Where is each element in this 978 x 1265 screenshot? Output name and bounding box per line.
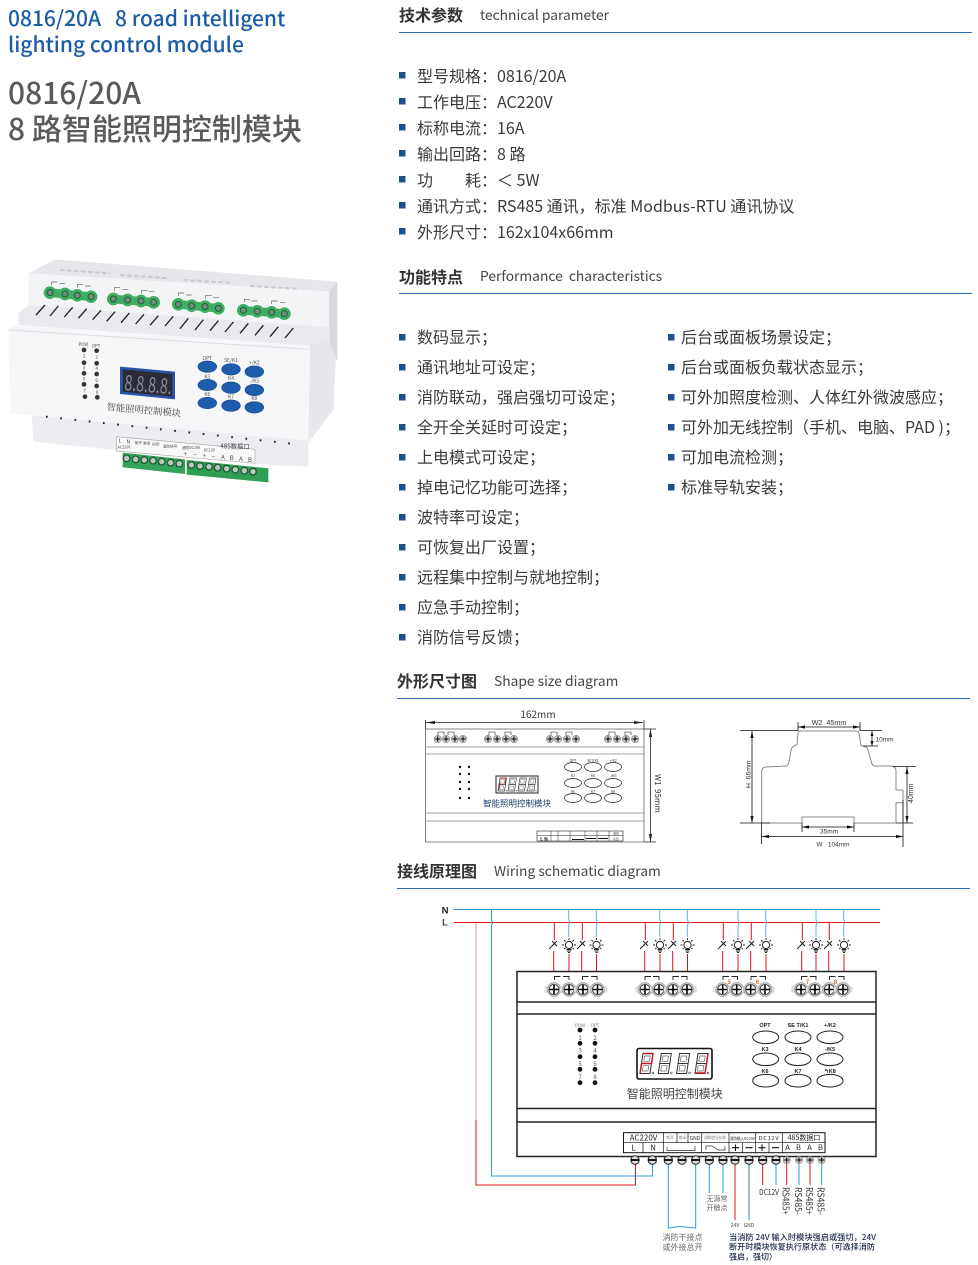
button labels: OPT [759,1023,771,1029]
feature list left: 消防信号反馈； [417,624,529,648]
W2 45mm dimension [798,718,860,731]
status LEDs: 3 [578,1046,582,1054]
parameter list [399,63,794,243]
blue buttons [198,361,264,413]
terminal table: A [807,1142,812,1153]
status LEDs: OPT [591,1023,600,1029]
status LEDs: 7 [83,389,86,395]
fire input note [729,1232,876,1262]
terminal labels: B [248,455,252,464]
section heading: performance characteristics: 功能特点 [399,264,463,288]
section heading: performance characteristics [399,264,972,294]
terminal table [537,831,623,843]
labels: fire dry contact: 或外接总开 [662,1242,702,1253]
fire input note: 断开时模块恢复执行原状态（可选择消防 [729,1242,875,1252]
fire input note: 强启，强切） [729,1252,777,1262]
section heading: technical parameter [399,2,972,32]
parameter list: 耗：＜ 5W [465,167,540,191]
output terminals [545,982,852,996]
side profile outline [762,731,903,823]
feature list left: 通讯地址可设定； [417,354,545,378]
feature list right: 后台或面板负载状态显示； [681,354,873,378]
section heading: wiring schematic diagram [397,858,970,888]
button labels: +/K2 [249,359,260,366]
button labels: -/K5 [610,774,616,779]
width dimension 162mm: 162mm [520,706,556,721]
terminal labels: A [221,452,225,461]
feature list left: 上电模式可设定； [417,444,545,468]
feature list left: 应急手动控制； [417,594,529,618]
H 66mm dimension: H 66mm [746,760,752,788]
terminal labels: − [212,451,216,460]
terminal labels: 常开 [135,440,142,446]
10mm dimension: 10mm [876,736,894,744]
button labels [759,1023,836,1075]
status LEDs [78,342,101,400]
terminal labels: 消防信号 [163,443,178,449]
parameter list: 标称电流：16A [417,115,525,139]
status LEDs: 3 [83,365,86,371]
terminal labels: 485数据口 [220,442,250,451]
terminal table: A B [613,838,619,842]
button labels: K8 [251,395,258,402]
button labels: K4 [591,774,595,779]
digital display [120,366,175,400]
terminal table: 常闭 [678,1134,686,1141]
width dimension 162mm [426,706,644,729]
labels: RS485 [780,1187,828,1215]
terminal table: 485数据口 [788,1133,820,1143]
buttons [564,762,622,802]
lamp neutral wires [569,910,845,937]
parameter list: 工作电压：AC220V [417,89,553,113]
relay brackets: 7 [806,978,809,986]
terminal labels: AC220V [118,446,131,451]
section heading: technical parameter: 技术参数 [399,2,463,26]
terminal labels [117,437,255,464]
English title: lighting control module [8,29,244,59]
height dimension 95mm [644,729,663,842]
button labels: K3 [571,774,575,779]
button labels: K8 [611,790,615,795]
feature list left: 掉电记忆功能可选择； [417,474,577,498]
button labels: K3 [761,1047,769,1053]
button labels: -/K5 [825,1047,835,1053]
status LEDs: 6 [593,1059,597,1068]
status LEDs: POW [78,342,88,348]
English title: 0816/20A [8,3,102,33]
digital display: 8.8.8.8. [123,366,173,400]
button labels: K6 [571,790,575,795]
top terminals [44,282,291,320]
button labels: K7 [228,393,234,400]
40mm dimension: 40mm [908,783,915,803]
slanted marks [36,305,293,338]
section heading: shape size diagram: 外形尺寸图 [397,668,477,692]
fire input note: 当消防 24V 输入时模块强启或强切，24V [729,1232,876,1243]
40mm dimension [893,766,916,823]
labels: RS485: RS485+ [780,1187,792,1215]
button labels: K6 [761,1069,769,1075]
labels: 24V GND [731,1222,755,1229]
button labels: K7 [794,1069,802,1075]
parameter list: 通讯方式：RS485 通讯，标准 Modbus-RTU 通讯协议 [417,193,794,217]
labels: RS485: RS485- [814,1187,828,1215]
section heading: shape size diagram: Shape size diagram [494,670,618,690]
parameter list: 功 [417,167,433,191]
terminal table: 消防输入DC24V [730,1135,755,1142]
terminal labels: GND [152,442,160,447]
buttons [753,1031,843,1087]
button labels: K6 [204,391,211,398]
status LEDs: 5 [578,1059,582,1068]
status LEDs: 2 [593,1033,597,1042]
terminal table: A [785,1142,790,1153]
button labels: +/K2 [824,1023,836,1029]
terminal labels: N [127,438,131,445]
load switch wires [554,922,844,972]
status LEDs: 8 [593,1072,597,1081]
status LEDs: POW [575,1023,585,1029]
W 104mm dimension: W 104mm [816,842,850,848]
status LEDs: OPT [92,343,101,349]
terminal table: 485 [613,832,619,837]
button labels: K7 [591,790,595,795]
top slot marks [60,270,297,289]
screw terminals [434,732,639,743]
module body [517,972,876,1156]
feature list right [668,324,960,498]
button labels: K4 [228,375,234,382]
parameter list: 外形尺寸：162x104x66mm [417,219,614,243]
wiring schematic [442,906,880,1262]
35mm dimension: 35mm [820,828,838,836]
button labels: K3 [204,373,211,380]
terminal labels: L [119,438,122,445]
button labels [570,759,617,795]
terminal labels: DC12V [204,448,216,453]
feature list right: 可外加无线控制（手机、电脑、PAD )； [681,414,960,438]
status LEDs: 2 [95,355,98,361]
parameter list: 输出回路：8 路 [417,141,525,165]
labels: passive contact: 无源常 [706,1194,728,1204]
labels: passive contact: 开触点 [706,1203,728,1213]
relay brackets: 5 [728,978,731,986]
status LEDs: 5 [83,377,86,383]
display [496,776,538,793]
terminal table: B [796,1142,801,1153]
status LEDs: 8 [96,390,99,396]
English title: 8 road intelligent [115,3,285,33]
relay brackets: 6 [756,978,759,986]
terminal table: 消防信号反馈 [704,1134,726,1141]
English title [8,3,285,59]
bottom terminals [123,453,268,482]
labels: RS485: RS485- [792,1187,805,1215]
dot row [46,417,294,444]
relay brackets: 8 [834,978,837,986]
LEDs [459,766,470,799]
N and L bus: N [442,906,449,916]
labels: 24V GND: GND [744,1222,755,1229]
module name: 智能照明控制模块 [106,399,182,420]
W2 45mm dimension: W2 45mm [812,718,846,727]
button labels [202,355,260,402]
feature list left [399,324,625,648]
terminal table [624,1132,825,1154]
label: DC12V: DC12V [759,1187,779,1198]
section heading: performance characteristics: Performance characteristics [480,265,662,285]
labels: fire dry contact [662,1232,702,1253]
terminal table: L N [540,836,548,843]
relay brackets [554,976,844,986]
terminal labels: + [203,450,207,459]
seven segment display [637,1048,712,1079]
feature list right: 可加电流检测； [681,444,793,468]
button labels: ↰K8 [824,1068,836,1075]
product photo [8,259,337,482]
button labels: SE/K1 [224,357,238,364]
height dimension 95mm: W1 95mm [652,774,663,813]
terminal labels: + [184,449,188,458]
terminal table: AC220V [630,1132,658,1144]
button labels: +/K2 [609,759,617,764]
N and L bus [442,906,880,928]
section heading: wiring schematic diagram: Wiring schematic diagram [494,860,661,880]
35mm dimension [802,823,854,836]
Chinese title: 8 路智能照明控制模块 [8,105,302,149]
status LEDs [575,1023,600,1085]
labels: 24V GND: 24V [731,1222,739,1229]
module name: 智能照明控制模块 [483,798,551,810]
section heading: wiring schematic diagram: 接线原理图 [397,858,477,882]
button labels: K4 [794,1047,802,1053]
front dimension drawing [426,706,663,843]
labels: passive contact [706,1194,728,1213]
button labels: SET/K1 [587,759,599,764]
labels: fire dry contact: 消防干接点 [662,1232,702,1243]
terminal table: B [818,1142,823,1153]
power feed wires [476,910,652,1185]
terminal table: L [631,1143,636,1154]
feature list left: 全开全关延时可设定； [417,414,577,438]
button labels: OPT [202,355,212,362]
terminal table: N [650,1143,656,1154]
feature list left: 消防联动，强启强切可设定； [417,384,625,408]
status LEDs: 7 [578,1072,582,1081]
terminal labels: A [239,454,243,463]
switches [549,941,832,949]
H 66mm dimension [740,730,798,823]
section heading: technical parameter: technical parameter [480,4,610,24]
status LEDs: 4 [593,1046,597,1054]
terminal labels: 消防DC24V [182,445,201,451]
status LEDs: 6 [95,378,98,384]
W 104mm dimension [762,800,903,848]
feature list left: 可恢复出厂设置； [417,534,545,558]
status LEDs: 1 [578,1033,582,1042]
status LEDs: 4 [95,366,98,372]
feature list left: 波特率可设定； [417,504,529,528]
button labels: OPT [570,759,576,764]
status LEDs: 1 [83,353,86,359]
button labels: SE T/K1 [788,1023,808,1029]
side dimension drawing [740,718,916,848]
feature list right: 后台或面板场景设定； [681,324,841,348]
bottom wires [668,1160,822,1228]
Chinese title [8,69,302,149]
module name: 智能照明控制模块 [627,1085,723,1102]
terminal labels: 常闭 [143,441,151,447]
feature list right: 可外加照度检测、人体红外微波感应； [681,384,953,408]
10mm dimension [860,730,894,746]
bottom terminals [631,1156,825,1164]
lamps [562,938,851,952]
feature list right: 标准导轨安装； [681,474,793,498]
parameter list: 型号规格：0816/20A [417,63,567,87]
Chinese title: 0816/20A [8,69,141,113]
button labels: -/K5 [249,378,259,385]
terminal table: GND [690,1135,701,1142]
labels: RS485: RS485+ [803,1187,816,1215]
N and L bus: L [442,918,448,928]
feature list left: 远程集中控制与就地控制； [417,564,609,588]
terminal table: DC12V [759,1134,779,1142]
terminal labels: − [193,450,197,459]
terminal table: 常开 [666,1134,674,1141]
section heading: shape size diagram [397,668,970,698]
terminal labels: B [230,453,234,462]
feature list left: 数码显示； [417,324,497,348]
